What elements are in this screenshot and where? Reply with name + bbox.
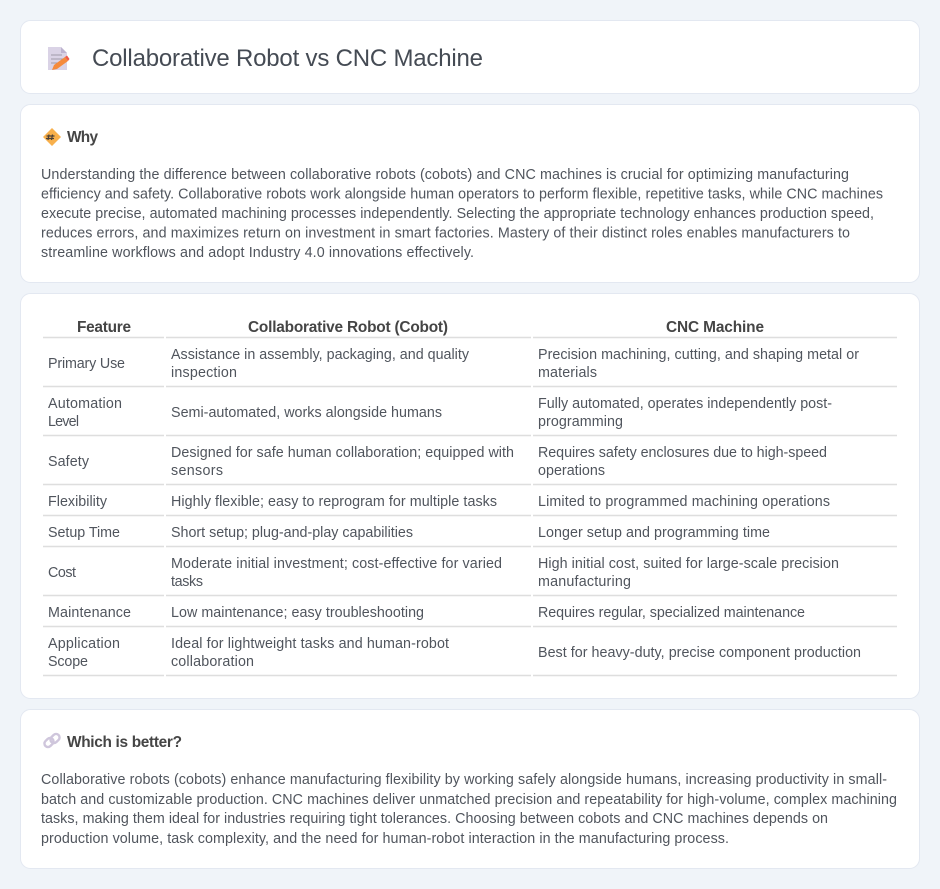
- text block: which is better paragraph: production volume, task complexity, and the need for human-robot interaction in the manufacturing process.: [41, 831, 729, 847]
- row: primary use: inspection: [171, 365, 237, 381]
- text block: why paragraph: execute precise, automated machining processes independently. Selecting the appropriate technology enhances production speed,: [41, 206, 874, 222]
- title: Collaborative Robot vs CNC Machine: [92, 45, 483, 72]
- row: flexibility: Limited to programmed machining operations: [538, 494, 830, 510]
- row: maintenance: Requires regular, specialized maintenance: [538, 605, 805, 621]
- text block: which is better paragraph: Collaborative robots (cobots) enhance manufacturing flexibility by working safely alongside humans, increasing productivity in small-: [41, 772, 887, 788]
- row: setup time: [48, 525, 770, 541]
- row: application scope: Scope: [48, 654, 88, 670]
- row: application scope: Application: [48, 636, 120, 652]
- text block: which is better paragraph: batch and customizable production. CNC machines deliver unmatched precision and repeatability for high-volume, complex machining: [41, 792, 897, 808]
- row: primary use: Assistance in assembly, packaging, and quality: [171, 347, 470, 363]
- panel: which is better: [20, 710, 920, 868]
- row: automation level: Fully automated, operates independently post-: [538, 396, 832, 412]
- row: safety: Safety: [48, 454, 90, 470]
- row: application scope: Ideal for lightweight tasks and human-robot: [171, 636, 449, 652]
- row: application scope: Best for heavy-duty, precise component production: [538, 645, 861, 661]
- table header row: CNC Machine: [666, 319, 764, 336]
- table header row: Feature: [77, 319, 131, 336]
- table header row: [77, 319, 764, 336]
- row: setup time: Setup Time: [48, 525, 120, 541]
- row: safety: Requires safety enclosures due to high-speed: [538, 445, 827, 461]
- row: automation level: Automation: [48, 396, 122, 412]
- icon: document with pencil: [48, 47, 70, 70]
- table header row: Collaborative Robot (Cobot): [248, 319, 448, 336]
- text block: why paragraph: [41, 167, 883, 261]
- heading: which is better: Which is better?: [67, 734, 182, 751]
- row: automation level: Level: [48, 414, 79, 430]
- row: safety: [48, 445, 827, 479]
- row: application scope: collaboration: [171, 654, 254, 670]
- row: safety: operations: [538, 463, 605, 479]
- panel: why: [20, 104, 920, 282]
- row: automation level: programming: [538, 414, 623, 430]
- row: flexibility: [48, 494, 830, 510]
- icon: warning diamond: [43, 128, 61, 146]
- row: flexibility: Highly flexible; easy to reprogram for multiple tasks: [171, 494, 497, 510]
- row: primary use: [48, 347, 859, 381]
- text block: why paragraph: streamline workflows and adopt Industry 4.0 innovations effectively.: [41, 245, 474, 261]
- row: maintenance: [48, 605, 805, 621]
- row: cost: High initial cost, suited for large-scale precision: [538, 556, 839, 572]
- text block: why paragraph: reduces errors, and maximizes return on investment in smart factories. Mastery of their distinct roles enables manufacturers to: [41, 226, 850, 242]
- row: primary use: Primary Use: [48, 356, 125, 372]
- row: maintenance: Low maintenance; easy troubleshooting: [171, 605, 424, 621]
- row: maintenance: Maintenance: [48, 605, 131, 621]
- panel: comparison table: [20, 294, 920, 698]
- row: automation level: [48, 396, 832, 430]
- row: cost: manufacturing: [538, 574, 631, 590]
- row: safety: sensors: [171, 463, 223, 479]
- row: safety: Designed for safe human collaboration; equipped with: [171, 445, 514, 461]
- heading: why: Why: [67, 129, 98, 146]
- row: automation level: Semi-automated, works alongside humans: [171, 405, 442, 421]
- row: cost: [48, 556, 839, 590]
- row: cost: tasks: [171, 574, 203, 590]
- text block: why paragraph: Understanding the difference between collaborative robots (cobots) and CNC machines is crucial for optimizing manufacturing: [41, 167, 849, 183]
- row: primary use: materials: [538, 365, 597, 381]
- row: primary use: Precision machining, cutting, and shaping metal or: [538, 347, 859, 363]
- text block: which is better paragraph: [41, 772, 897, 847]
- row: cost: Moderate initial investment; cost-effective for varied: [171, 556, 502, 572]
- row: application scope: [48, 636, 861, 670]
- row: flexibility: Flexibility: [48, 494, 108, 510]
- row: setup time: Longer setup and programming time: [538, 525, 770, 541]
- row: cost: Cost: [48, 565, 76, 581]
- panel: header: [20, 20, 920, 94]
- text block: which is better paragraph: tasks, making them ideal for industries requiring tight tolerances. Choosing between cobots and CNC machines depends on: [41, 811, 828, 827]
- text block: why paragraph: efficiency and safety. Collaborative robots work alongside human operators to perform flexible, repetitive tasks, while CNC machines: [41, 187, 883, 203]
- icon: link: [43, 732, 61, 749]
- row: setup time: Short setup; plug-and-play capabilities: [171, 525, 413, 541]
